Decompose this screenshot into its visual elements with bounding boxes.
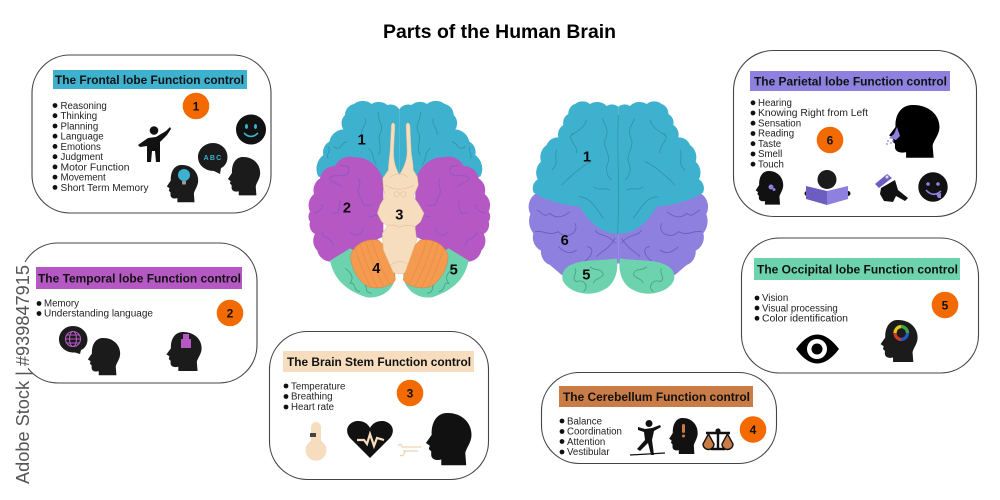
list: frontal functions: Emotions (60, 142, 101, 153)
list: temporal functions: Memory (44, 299, 79, 310)
list: temporal functions (37, 299, 153, 320)
list: brain stem functions: Breathing (291, 392, 332, 403)
list: brain stem functions (284, 382, 345, 413)
brain: top view (529, 101, 708, 294)
list: frontal functions: Motor Function (60, 162, 130, 173)
heading: parietal (750, 71, 950, 91)
region numbers: 6 (561, 233, 569, 249)
number badge 1: 1 (193, 100, 200, 114)
brain: underside view (308, 101, 490, 298)
icon: face tasting (918, 172, 948, 202)
number badge 2: 2 (227, 306, 234, 320)
number badge 4 (740, 416, 766, 443)
list: cerebellum functions: Balance (567, 416, 602, 428)
number badge 5 (932, 292, 958, 318)
list: cerebellum functions: Vestibular (567, 447, 610, 458)
region numbers: 1 (358, 133, 366, 149)
list: temporal functions: Understanding language (44, 309, 153, 320)
list: occipital functions: Visual processing (762, 303, 838, 314)
icon: eye (796, 334, 839, 364)
panel: frontal lobe (32, 55, 271, 213)
list: cerebellum functions (560, 416, 622, 458)
icon: person reading (804, 170, 850, 205)
icon: hand touching (875, 174, 908, 202)
number badge 2 (217, 300, 243, 326)
list: frontal functions: Reasoning (60, 101, 107, 112)
region numbers: 3 (395, 208, 403, 224)
list: frontal functions: Judgment (60, 152, 103, 163)
list: parietal functions: Sensation (758, 118, 801, 130)
list: parietal functions (751, 98, 868, 170)
icon: head exhaling (398, 413, 472, 465)
region numbers: 1 (583, 150, 591, 166)
list: cerebellum functions: Attention (567, 437, 605, 448)
heading: cerebellum: The Cerebellum Function control (563, 390, 750, 404)
list: parietal functions: Smell (758, 149, 782, 160)
list: parietal functions: Hearing (758, 98, 792, 109)
icon: head with colour ring (881, 320, 918, 362)
region numbers: 2 (343, 200, 351, 216)
list: frontal functions: Planning (60, 122, 98, 132)
icon: balance scales (703, 428, 733, 450)
panel: cerebellum (542, 372, 776, 464)
list: parietal functions: Knowing Right from Left (758, 108, 868, 119)
panel: parietal lobe (734, 50, 976, 216)
number badge 3 (397, 380, 423, 406)
heading: parietal: The Parietal lobe Function control (754, 74, 947, 88)
list: parietal functions: Reading (758, 129, 794, 140)
list: frontal functions (53, 101, 149, 194)
region numbers: 5 (582, 267, 590, 283)
list: occipital functions: Vision (762, 293, 788, 304)
region numbers: 5 (450, 262, 458, 278)
number badge 3: 3 (407, 386, 414, 400)
heading: frontal: The Frontal lobe Function control (55, 73, 244, 87)
list: brain stem functions: Temperature (291, 382, 345, 392)
region numbers: 4 (372, 261, 381, 277)
icon: head with ABC speech bubble (198, 143, 260, 195)
number badge 1 (183, 93, 209, 119)
list: frontal functions: Short Term Memory (60, 183, 149, 194)
icon: head with globe bubble (59, 326, 120, 375)
list: brain stem functions: Heart rate (291, 402, 334, 413)
list: occipital functions: Color identification (762, 314, 848, 324)
brain stem (377, 123, 424, 274)
panel: temporal lobe (20, 243, 257, 383)
heading: brain stem: The Brain Stem Function control (287, 355, 471, 369)
icon: person pointing (138, 126, 171, 162)
list: frontal functions: Language (60, 132, 104, 143)
title: Parts of the Human Brain (383, 22, 616, 43)
heading: temporal: The Temporal lobe Function control (38, 272, 241, 286)
number badge 4: 4 (750, 423, 757, 437)
icon: heart with pulse (347, 421, 393, 458)
heading: occipital (754, 258, 960, 280)
panel: brain stem (270, 332, 488, 480)
icon: person balancing (630, 420, 665, 455)
heading: brain stem (283, 351, 474, 372)
number badge 6: 6 (827, 134, 834, 148)
region numbers (343, 133, 458, 278)
list: frontal functions: Movement (60, 173, 106, 184)
icon: head with exclamation (669, 418, 698, 454)
icon: head with ABC speech bubble: ABC (204, 155, 222, 162)
number badge 5: 5 (942, 298, 949, 312)
heading: occipital: The Occipital lobe Function control (757, 262, 958, 276)
icon: head with light bulb (167, 165, 198, 202)
icon: head with memory stick (166, 332, 202, 371)
icon: thermometer (306, 422, 326, 461)
list: frontal functions: Thinking (60, 111, 97, 122)
icon: smiling face (236, 114, 266, 144)
number badge 6 (817, 127, 843, 153)
region numbers (561, 150, 591, 283)
panel: occipital lobe (742, 238, 978, 373)
heading: temporal (36, 267, 242, 289)
list: parietal functions: Taste (758, 139, 781, 150)
icon: head hearing (756, 171, 783, 205)
icon: head smelling (886, 105, 939, 158)
list: occipital functions (755, 293, 848, 324)
list: cerebellum functions: Coordination (567, 427, 622, 438)
list: parietal functions: Touch (758, 160, 784, 170)
stock watermark strip: Adobe Stock | #939847915 (13, 265, 33, 484)
heading: cerebellum (559, 386, 753, 407)
